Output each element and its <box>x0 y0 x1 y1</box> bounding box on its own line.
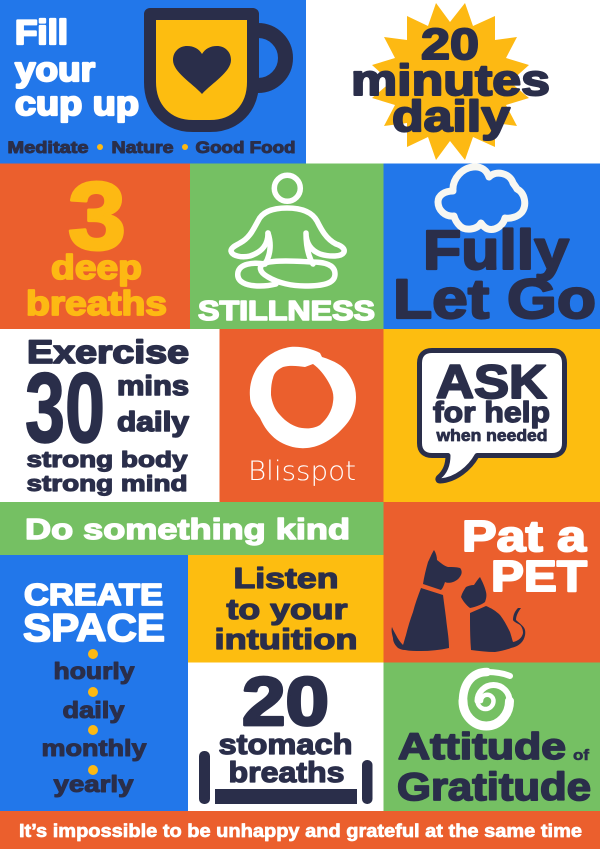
icon: speech bubble <box>420 350 564 481</box>
panel: footer banner <box>0 811 600 849</box>
heading: fully let go <box>393 218 596 330</box>
text: listen to your intuition: Listen <box>234 563 338 595</box>
panel: exercise <box>0 329 220 502</box>
panel: pat a pet <box>384 502 600 662</box>
text: stomach breaths: stomach <box>218 729 352 761</box>
icon: enso ring <box>250 347 356 448</box>
text: ask for help when needed: ASK <box>436 355 547 408</box>
heading: pat a pet: Pat a <box>462 512 587 561</box>
text: ask for help when needed <box>433 355 550 445</box>
list: hourly daily monthly yearly: daily <box>62 697 124 723</box>
heading: create space <box>23 577 165 650</box>
heading: fully let go: Fully <box>423 218 569 281</box>
list: hourly daily monthly yearly: hourly <box>54 658 134 684</box>
text: stomach breaths: breaths <box>228 757 344 789</box>
text: mins daily: daily <box>117 406 189 437</box>
text: attitude of gratitude: Gratitude <box>397 766 591 809</box>
heading: pat a pet <box>462 512 587 601</box>
icon: spiral <box>463 672 510 726</box>
heading: create space: SPACE <box>23 607 165 650</box>
icon: meditating figure <box>231 175 344 286</box>
list: hourly daily monthly yearly: monthly <box>42 735 146 761</box>
text: deep breaths <box>26 249 167 323</box>
heading: fully let go: Let Go <box>393 267 596 330</box>
heading: create space: CREATE <box>24 577 163 612</box>
panel: ask for help <box>384 329 600 502</box>
icon: mug with heart <box>150 14 286 126</box>
panel: fill your cup up <box>0 0 306 164</box>
number: 20: 20 <box>242 663 329 740</box>
text: ask for help when needed: when needed <box>435 427 548 445</box>
heading: fill your cup up: cup up <box>15 85 139 123</box>
text: attitude of gratitude: Attitude <box>398 726 566 767</box>
icon: bed <box>199 751 372 804</box>
text: ask for help when needed: for help <box>433 397 550 429</box>
heading: 20 minutes daily: daily <box>392 92 511 141</box>
heading: exercise: Exercise <box>27 334 189 370</box>
text: stomach breaths <box>218 729 352 789</box>
text: listen to your intuition: to your <box>226 594 348 626</box>
label: stillness: STILLNESS <box>198 295 375 326</box>
heading: 20 minutes daily <box>351 20 550 141</box>
text: meditate nature good food: Nature <box>112 139 174 157</box>
panel: stillness <box>190 164 384 329</box>
text: deep breaths: breaths <box>26 285 167 323</box>
text: meditate nature good food: Good Food <box>196 139 296 157</box>
icon: sunburst <box>372 3 529 160</box>
text: listen to your intuition: intuition <box>214 624 358 656</box>
heading: 20 minutes daily: 20 <box>421 20 479 69</box>
panel: listen to your intuition <box>188 555 384 662</box>
text: footer quote: It’s impossible to be unhappy and grateful at the same time <box>19 821 582 841</box>
panel: attitude of gratitude <box>384 662 600 811</box>
panel: do something kind <box>0 502 384 555</box>
list: hourly daily monthly yearly: yearly <box>54 771 134 797</box>
text: strong body strong mind: strong body <box>26 447 188 472</box>
heading: 20 minutes daily: minutes <box>351 56 550 105</box>
logo text: blisspot: Blisspot <box>248 456 356 487</box>
text: meditate nature good food <box>8 139 296 157</box>
text: attitude of gratitude: of <box>573 747 590 764</box>
text: mins daily: mins <box>117 370 189 401</box>
panel: 3 deep breaths <box>0 163 190 329</box>
list: hourly daily monthly yearly <box>42 649 146 797</box>
text: strong body strong mind <box>26 447 188 496</box>
panel: blisspot logo <box>220 329 384 502</box>
text: do something kind: Do something kind <box>25 514 350 546</box>
text: listen to your intuition <box>214 563 358 656</box>
text: strong body strong mind: strong mind <box>26 471 188 496</box>
number: 30: 30 <box>25 352 105 463</box>
heading: fill your cup up: your <box>15 51 95 89</box>
number: 3: 3 <box>68 163 126 270</box>
heading: pat a pet: PET <box>491 552 587 601</box>
heading: fill your cup up: Fill <box>15 14 68 52</box>
text: deep breaths: deep <box>51 249 142 287</box>
panel: create space <box>0 555 188 811</box>
heading: fill your cup up <box>15 14 139 123</box>
panel: fully let go <box>384 164 600 330</box>
text: mins daily <box>117 370 189 437</box>
text: attitude of gratitude <box>397 726 591 809</box>
panel: 20 stomach breaths <box>188 662 384 811</box>
panel: 20 minutes daily <box>306 0 600 164</box>
text: meditate nature good food: Meditate <box>8 139 88 157</box>
icon: dog and cat silhouettes <box>392 550 525 652</box>
icon: cloud <box>438 167 525 229</box>
